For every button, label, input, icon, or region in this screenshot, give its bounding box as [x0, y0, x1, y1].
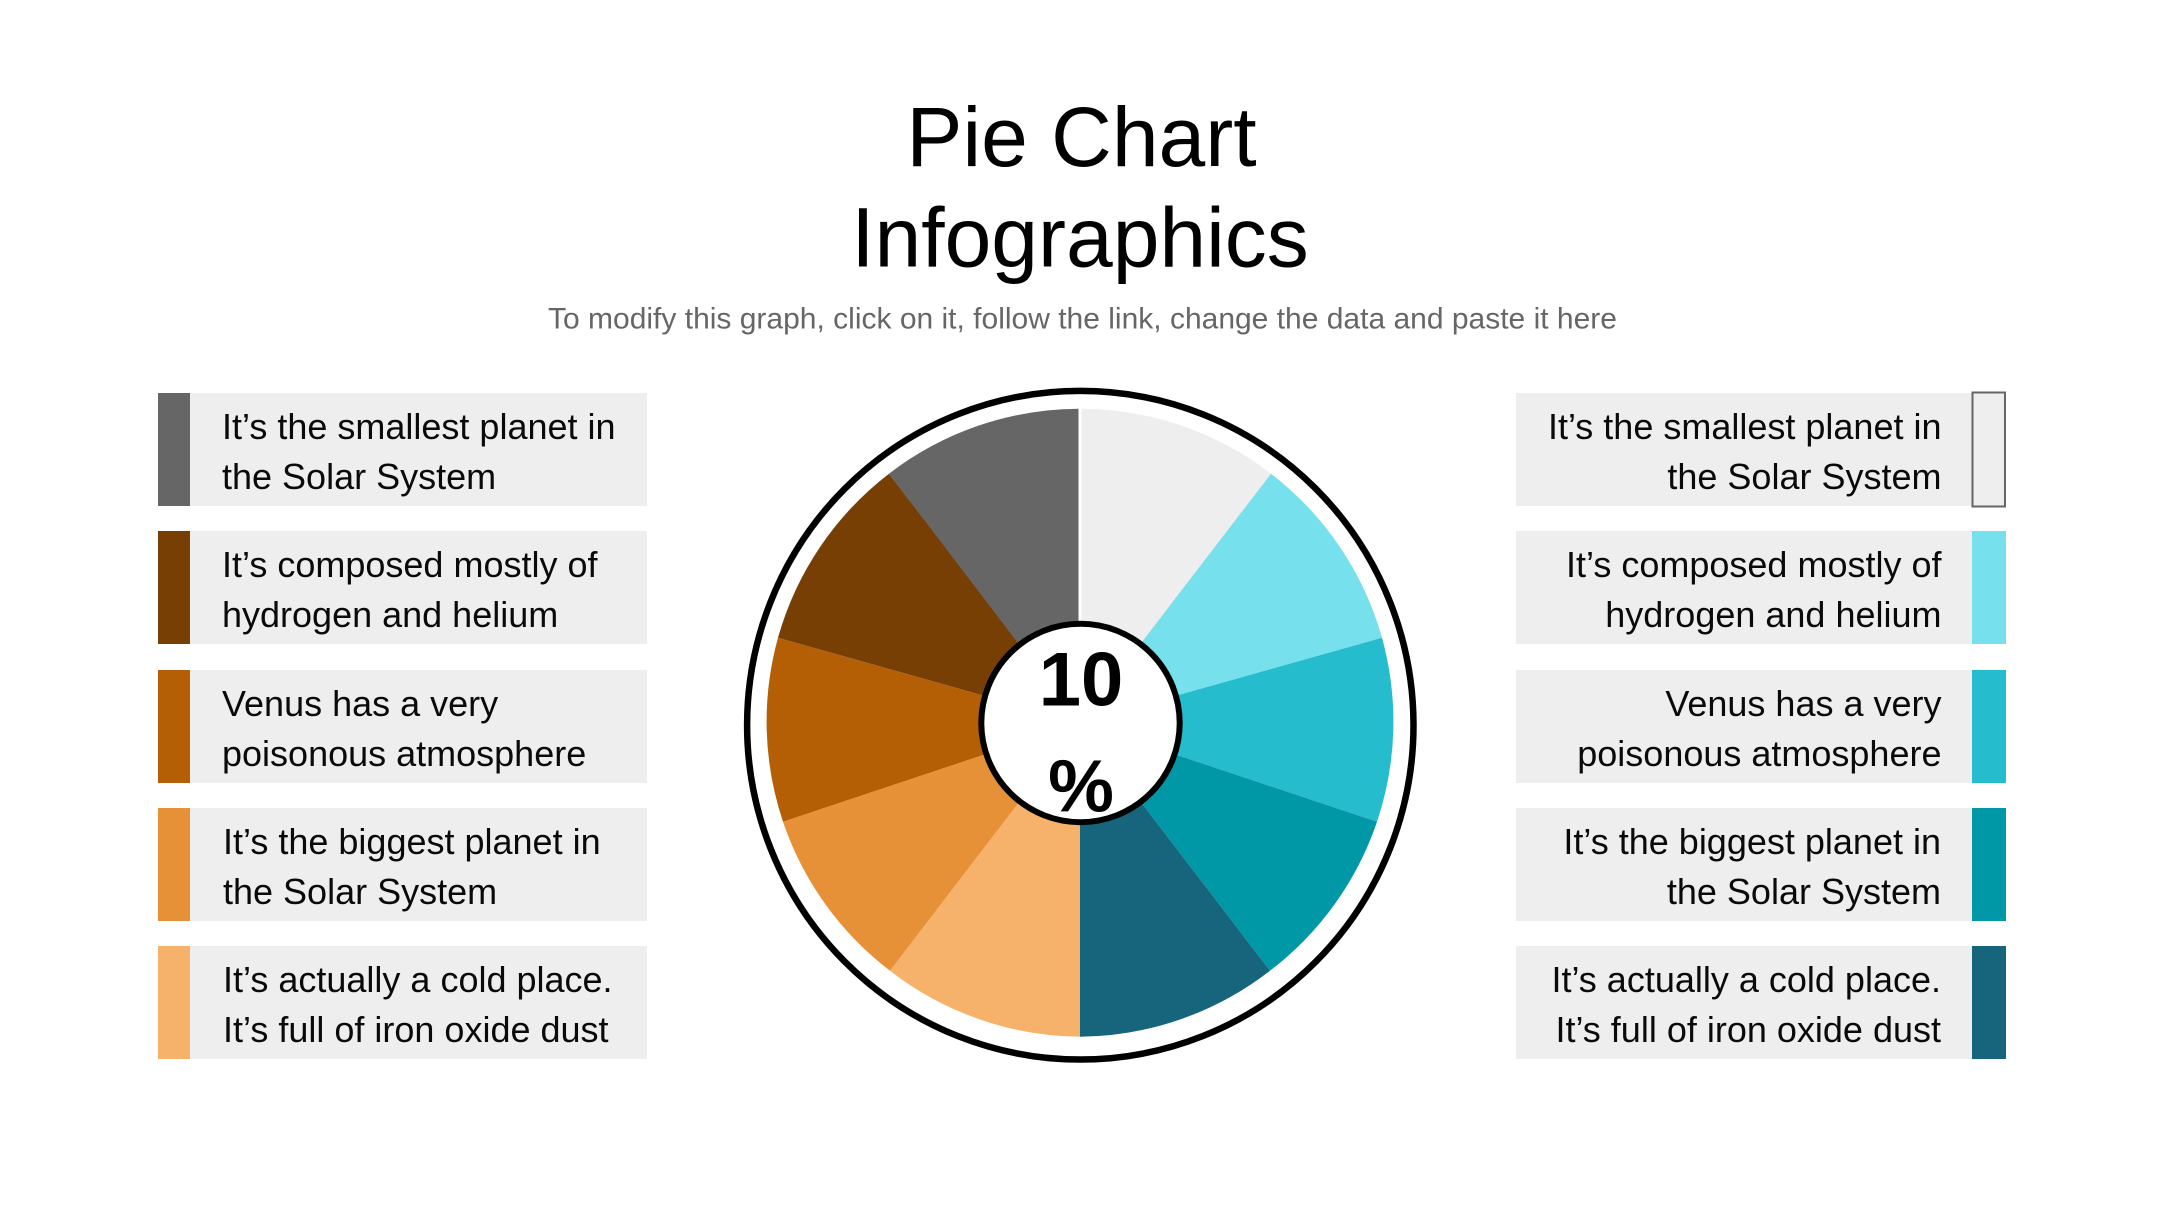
outer ring — [747, 391, 1414, 1060]
panel: right legend item 4: the Solar System — [1667, 871, 1941, 912]
panel: left legend item 2: It’s composed mostly of — [222, 544, 598, 585]
subtitle: To modify this graph, click on it, follow the link, change the data and paste it here — [548, 302, 1617, 336]
panel: right legend item 2 — [1516, 531, 2006, 644]
panel: right legend item 2: It’s composed mostly of — [1566, 544, 1942, 585]
panel: left legend item 4: the Solar System — [223, 871, 497, 912]
panel: right legend item 1 — [1516, 392, 2006, 506]
title: Infographics — [851, 190, 1309, 284]
panel: right legend item 5: It’s full of iron oxide dust — [1555, 1009, 1941, 1050]
panel: left legend item 5: It’s full of iron oxide dust — [223, 1009, 609, 1050]
center hub with value: % — [1048, 745, 1114, 828]
title: Pie Chart — [906, 90, 1257, 184]
panel: left legend item 1: It’s the smallest planet in — [222, 406, 616, 447]
center hub with value: 10 — [1039, 638, 1123, 723]
pie slices — [767, 409, 1393, 1037]
panel: left legend item 4: It’s the biggest planet in — [223, 821, 601, 862]
panel: right legend item 3 — [1516, 670, 2006, 783]
panel: right legend item 3: Venus has a very — [1665, 683, 1942, 724]
panel: left legend item 2: hydrogen and helium — [222, 594, 558, 635]
panel: right legend item 4 — [1516, 808, 2006, 921]
panel: left legend item 3: poisonous atmosphere — [222, 733, 586, 774]
panel: left legend item 5 — [158, 946, 647, 1059]
panel: right legend item 1: It’s the smallest planet in — [1548, 406, 1942, 447]
panel: right legend item 4: It’s the biggest planet in — [1563, 821, 1941, 862]
panel: left legend item 1 — [158, 393, 647, 506]
panel: right legend item 1: the Solar System — [1667, 456, 1942, 497]
pie chart — [747, 391, 1414, 1060]
panel: right legend item 5: It’s actually a cold place. — [1551, 959, 1941, 1000]
panel: left legend item 1: the Solar System — [222, 456, 496, 497]
panel: right legend item 5 — [1516, 946, 2006, 1059]
panel: left legend item 2 — [158, 531, 647, 644]
panel: right legend item 2: hydrogen and helium — [1605, 594, 1942, 635]
panel: left legend item 3 — [158, 670, 647, 783]
panel: left legend item 3: Venus has a very — [222, 683, 498, 724]
panel: left legend item 4 — [158, 808, 647, 921]
panel: right legend item 3: poisonous atmosphere — [1577, 733, 1942, 774]
title — [851, 90, 1309, 284]
panel: left legend item 5: It’s actually a cold place. — [223, 959, 613, 1000]
center hub with value — [981, 624, 1180, 828]
